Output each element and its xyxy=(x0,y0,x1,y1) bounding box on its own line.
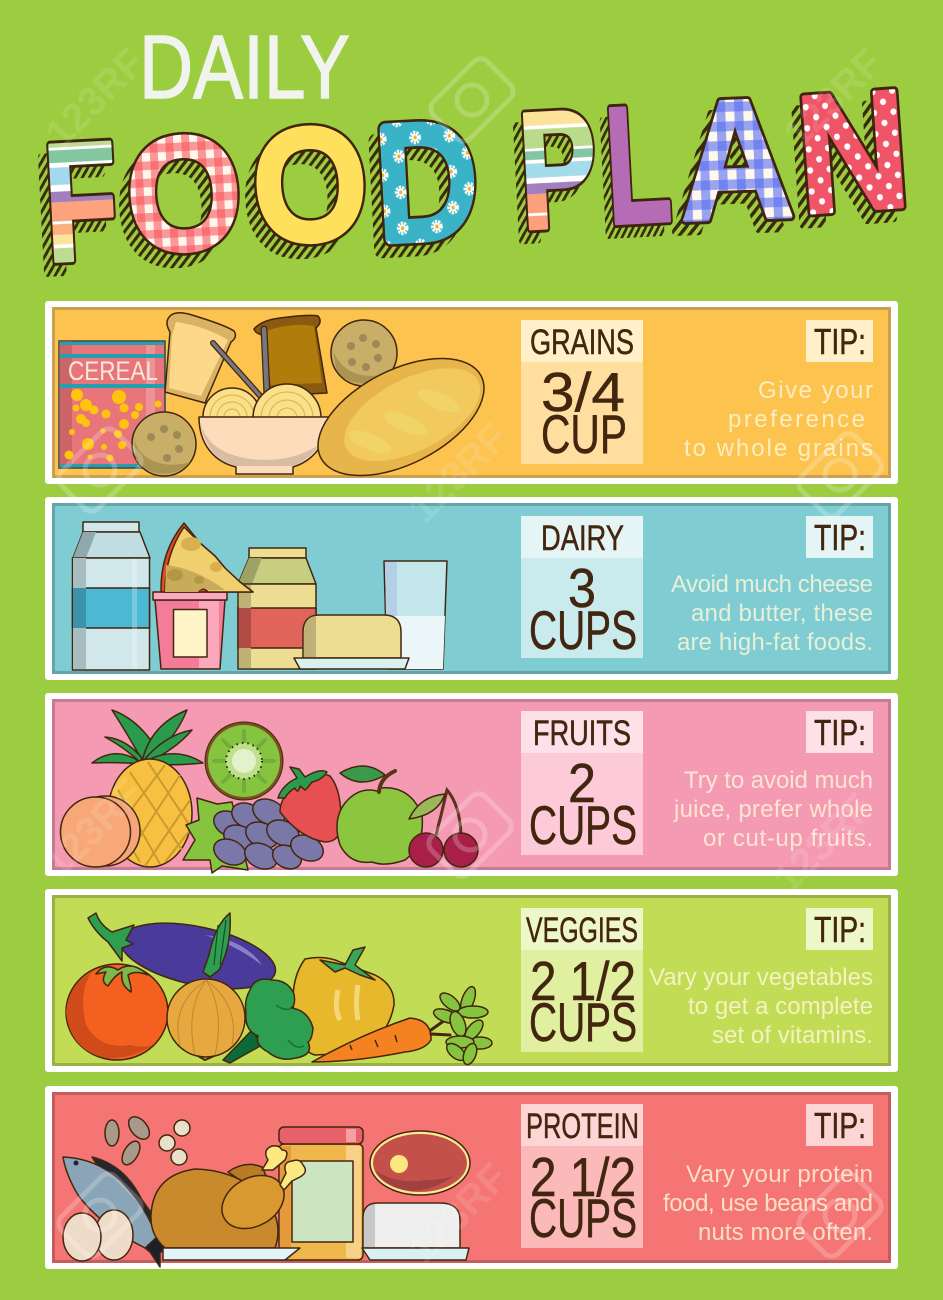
letter N: N xyxy=(782,67,906,262)
panel: fruits xyxy=(45,693,898,876)
tip: veggies: set of vitamins. xyxy=(712,1022,873,1049)
tip: protein: Vary your protein xyxy=(686,1161,873,1188)
apple xyxy=(337,766,422,864)
letter A: A xyxy=(676,63,796,256)
label: dairy: 3 xyxy=(568,557,596,619)
tip: veggies: TIP: xyxy=(814,909,866,950)
label: veggies: 2 1/2 xyxy=(530,950,636,1012)
letter A: A xyxy=(666,75,787,268)
letter N: N xyxy=(791,55,915,250)
tip: fruits: Try to avoid much xyxy=(684,767,873,794)
label: grains: 3/4 xyxy=(541,361,625,423)
letter F: F xyxy=(40,105,122,297)
cookie left xyxy=(132,412,196,476)
butter on plate xyxy=(294,615,409,669)
jar xyxy=(238,548,316,669)
letter P: P xyxy=(515,75,601,265)
tip: dairy: and butter, these xyxy=(691,600,873,627)
yogurt cup xyxy=(153,592,227,669)
label: veggies: CUPS xyxy=(529,991,637,1053)
bread loaf xyxy=(299,334,503,500)
letter F: F xyxy=(31,117,113,309)
label: dairy: CUPS xyxy=(529,599,637,661)
watermarks: 123RF xyxy=(400,1155,516,1271)
letter D: D xyxy=(363,105,470,285)
cherries xyxy=(409,790,478,867)
label: fruits xyxy=(521,711,643,856)
tip: protein: nuts more often. xyxy=(698,1219,873,1246)
nuts xyxy=(159,1120,190,1165)
label: veggies xyxy=(521,908,643,1053)
letter P: P xyxy=(515,75,601,265)
carrot leaves xyxy=(431,985,492,1066)
fish xyxy=(63,1157,180,1267)
strawberry xyxy=(278,767,341,842)
letter F: F xyxy=(40,105,122,297)
tip: dairy: TIP: xyxy=(814,517,866,558)
tip: protein xyxy=(663,1104,873,1246)
cheese wedge xyxy=(161,523,253,592)
toast light xyxy=(165,313,235,403)
label: protein xyxy=(521,1104,643,1249)
tip: fruits: TIP: xyxy=(814,712,866,753)
cereal box: CEREAL xyxy=(68,356,158,386)
title: food plan xyxy=(30,55,916,309)
roast turkey xyxy=(151,1146,305,1248)
turkey plate xyxy=(163,1248,300,1260)
tip: fruits: juice, prefer whole xyxy=(673,796,873,823)
grape leaf xyxy=(183,798,248,873)
steak xyxy=(370,1131,470,1195)
letter O yellow: O xyxy=(251,97,369,271)
letter A: A xyxy=(676,63,796,256)
tip: fruits: or cut-up fruits. xyxy=(703,825,873,852)
tip: veggies: to get a complete xyxy=(688,993,873,1020)
label: fruits: 2 xyxy=(568,752,596,814)
label: protein: CUPS xyxy=(529,1187,637,1249)
letter D: D xyxy=(372,92,480,273)
letter L: L xyxy=(601,71,675,259)
beans xyxy=(105,1113,153,1168)
peach xyxy=(60,796,140,867)
letter O gingham: O xyxy=(115,120,233,294)
carrot xyxy=(312,1018,431,1062)
tip: protein: TIP: xyxy=(814,1105,866,1146)
milk carton xyxy=(72,522,150,670)
toast dark xyxy=(254,315,327,396)
letter O gingham: O xyxy=(125,106,243,280)
tip: veggies xyxy=(649,908,873,1049)
pineapple xyxy=(92,710,203,867)
watermarks: 123RF xyxy=(400,415,516,531)
tip: fruits xyxy=(673,711,873,852)
tofu on plate xyxy=(362,1203,469,1260)
label: grains xyxy=(521,320,643,465)
grapes xyxy=(210,794,327,874)
panel: protein xyxy=(45,1086,898,1269)
tip: grains xyxy=(684,320,873,462)
spoons xyxy=(213,329,267,398)
cookie right xyxy=(331,320,397,386)
tip: grains: to whole grains xyxy=(684,435,873,462)
label: fruits: FRUITS xyxy=(533,714,631,753)
tip: dairy: are high-fat foods. xyxy=(677,629,873,656)
letter N: N xyxy=(791,55,915,250)
watermarks: 123RF xyxy=(775,40,891,156)
tomato xyxy=(66,964,168,1060)
panel: veggies xyxy=(45,889,898,1072)
watermarks: 123RF xyxy=(765,785,881,901)
tip: dairy xyxy=(671,516,873,656)
eggplant xyxy=(88,911,281,1001)
tip: grains: Give your xyxy=(758,377,873,404)
letter D: D xyxy=(372,92,480,273)
tip: veggies: Vary your vegetables xyxy=(649,964,873,991)
eggs xyxy=(63,1210,133,1261)
broccoli xyxy=(223,979,313,1063)
bowl of noodles xyxy=(199,384,329,474)
title: daily: DAILY xyxy=(139,18,350,118)
letter P: P xyxy=(506,87,593,277)
panel: grains xyxy=(45,301,898,500)
letter O yellow: O xyxy=(241,111,359,285)
letter L: L xyxy=(601,71,675,259)
label: veggies: VEGGIES xyxy=(526,911,638,950)
label: fruits: CUPS xyxy=(529,794,637,856)
onion xyxy=(167,913,245,1060)
letter O gingham: O xyxy=(125,106,243,280)
tip: grains: preference xyxy=(728,406,865,433)
watermarks: 123RF xyxy=(37,40,153,156)
tip: grains: TIP: xyxy=(814,321,866,362)
glass of milk xyxy=(384,561,447,669)
label: dairy: DAIRY xyxy=(541,519,624,558)
label: protein: 2 1/2 xyxy=(530,1146,636,1208)
tip: protein: food, use beans and xyxy=(663,1190,873,1217)
jar xyxy=(279,1127,363,1260)
cereal box xyxy=(59,341,165,468)
label: protein: PROTEIN xyxy=(526,1107,639,1146)
letter O yellow: O xyxy=(251,97,369,271)
label: grains: CUP xyxy=(541,403,627,465)
panel: dairy xyxy=(45,497,898,680)
letter L: L xyxy=(593,83,667,271)
label: dairy xyxy=(521,516,643,661)
watermarks: 123RF xyxy=(35,770,151,886)
label: grains: GRAINS xyxy=(530,323,634,362)
kiwi xyxy=(205,722,283,800)
tip: dairy: Avoid much cheese xyxy=(671,571,873,598)
pepper xyxy=(293,947,394,1055)
